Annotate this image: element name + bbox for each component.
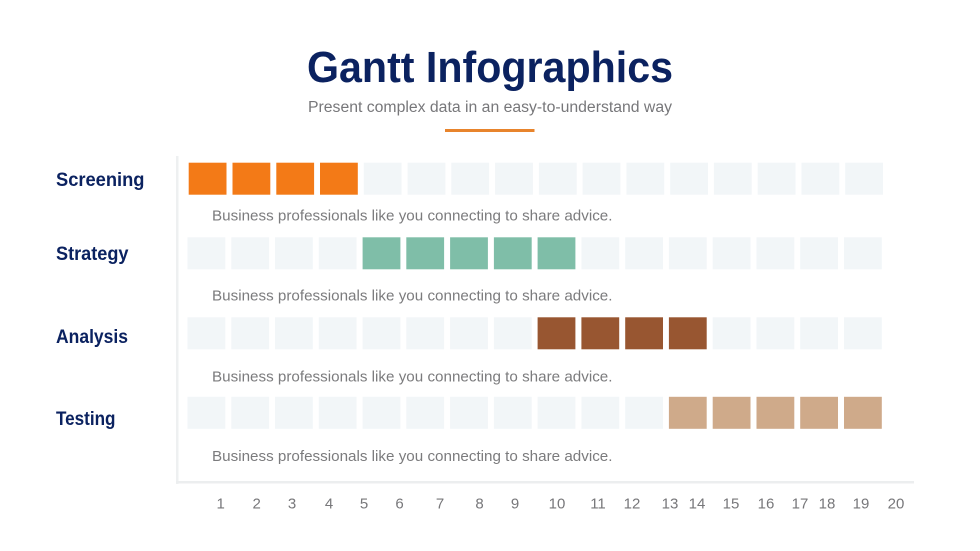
Screening bar cells, weeks 1 to 16 (189, 163, 883, 195)
row: Screening (56, 163, 883, 224)
label: Strategy: Strategy (56, 244, 129, 265)
chart axes (176, 156, 914, 484)
x-axis numbers 1 to 20: 16 (758, 496, 774, 512)
description: Testing: Business professionals like you connecting to share advice. (212, 448, 612, 465)
x-axis numbers 1 to 20: 18 (819, 496, 835, 512)
x-axis numbers 1 to 20: 11 (590, 496, 606, 512)
x-axis numbers 1 to 20: 13 (662, 496, 678, 512)
label: Screening: Screening (56, 170, 144, 191)
x-axis numbers 1 to 20: 8 (475, 496, 484, 512)
x-axis numbers 1 to 20: 17 (792, 496, 808, 512)
description: Screening: Business professionals like you connecting to share advice. (212, 208, 612, 224)
x-axis numbers 1 to 20: 2 (253, 496, 261, 512)
subtitle: Present complex data in an easy-to-understand way (308, 99, 672, 116)
x-axis numbers 1 to 20: 7 (436, 496, 444, 512)
x-axis numbers 1 to 20: 14 (689, 496, 705, 512)
x-axis numbers 1 to 20: 6 (395, 496, 404, 512)
row: Analysis (56, 317, 882, 386)
Testing bar cells, weeks 1 to 16 (188, 397, 882, 429)
x-axis numbers 1 to 20: 3 (288, 496, 296, 512)
title underline accent (445, 129, 534, 132)
x-axis numbers 1 to 20: 5 (360, 496, 368, 512)
x-axis numbers 1 to 20: 4 (325, 496, 333, 512)
title: Gantt Infographics (307, 43, 673, 92)
x-axis numbers 1 to 20 (217, 496, 904, 512)
label: Analysis: Analysis (56, 327, 128, 348)
label: Testing: Testing (56, 409, 116, 430)
x-axis numbers 1 to 20: 15 (723, 496, 739, 512)
x-axis numbers 1 to 20: 20 (888, 496, 904, 512)
Strategy bar cells, weeks 1 to 16 (188, 237, 882, 269)
row: Testing (56, 397, 882, 465)
description: Strategy: Business professionals like you connecting to share advice. (212, 288, 612, 304)
description: Analysis: Business professionals like you connecting to share advice. (212, 368, 612, 386)
x-axis numbers 1 to 20: 9 (511, 496, 519, 512)
x-axis numbers 1 to 20: 10 (549, 496, 565, 512)
row: Strategy (56, 237, 882, 304)
x-axis numbers 1 to 20: 1 (217, 496, 225, 512)
x-axis numbers 1 to 20: 19 (853, 496, 869, 512)
Analysis bar cells, weeks 1 to 16 (188, 317, 882, 349)
x-axis numbers 1 to 20: 12 (624, 496, 640, 512)
